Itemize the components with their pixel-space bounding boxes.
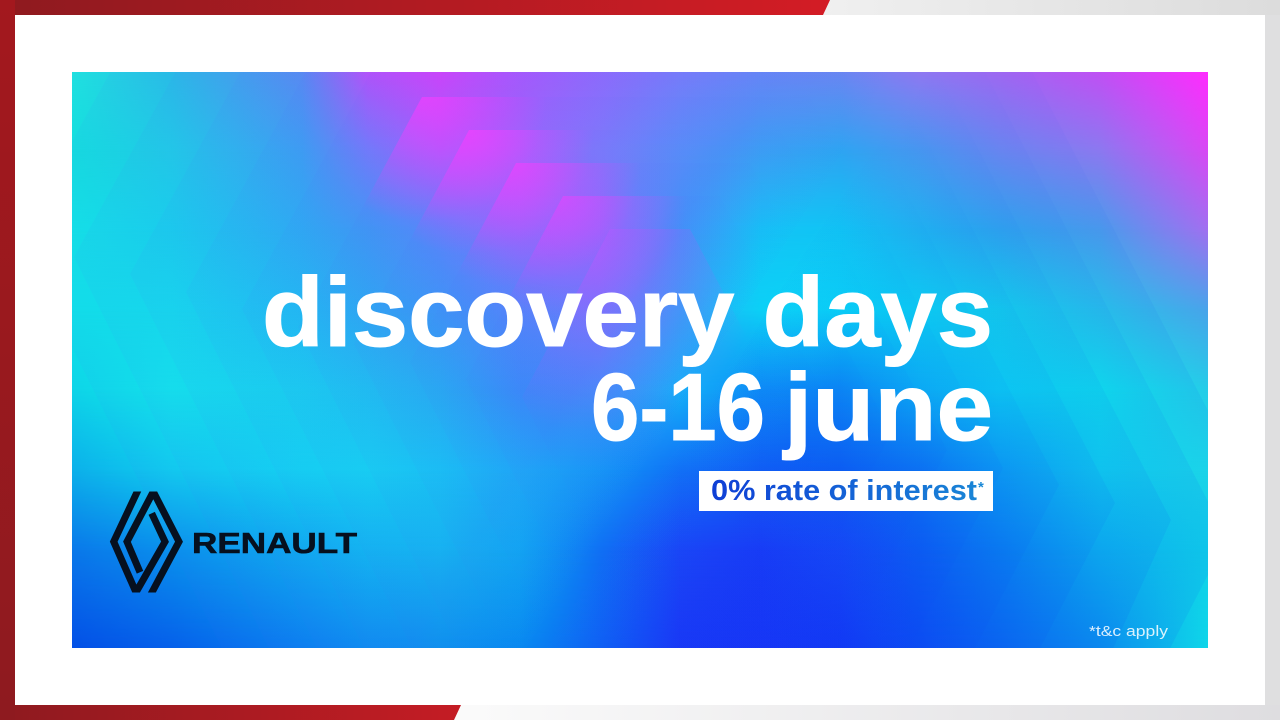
callout: 0% rate of interest — [699, 471, 993, 511]
heading: 6-16 june — [591, 354, 993, 461]
callout: 0% rate of interest: 0% rate of interest — [711, 475, 977, 507]
footnote: t&c apply: *t&c apply — [1089, 623, 1169, 640]
callout: 0% rate of interest: * — [978, 479, 984, 496]
panel: gradient banner with hexagon pattern — [72, 72, 1208, 648]
icon: Renault diamond — [114, 488, 179, 596]
heading: 6-16 june: june — [782, 354, 993, 461]
wordmark: RENAULT: RENAULT — [192, 528, 357, 560]
logo: Renault — [114, 488, 357, 596]
heading: discovery days: discovery days — [262, 257, 993, 367]
heading: 6-16 june: 6-16 — [591, 354, 765, 461]
